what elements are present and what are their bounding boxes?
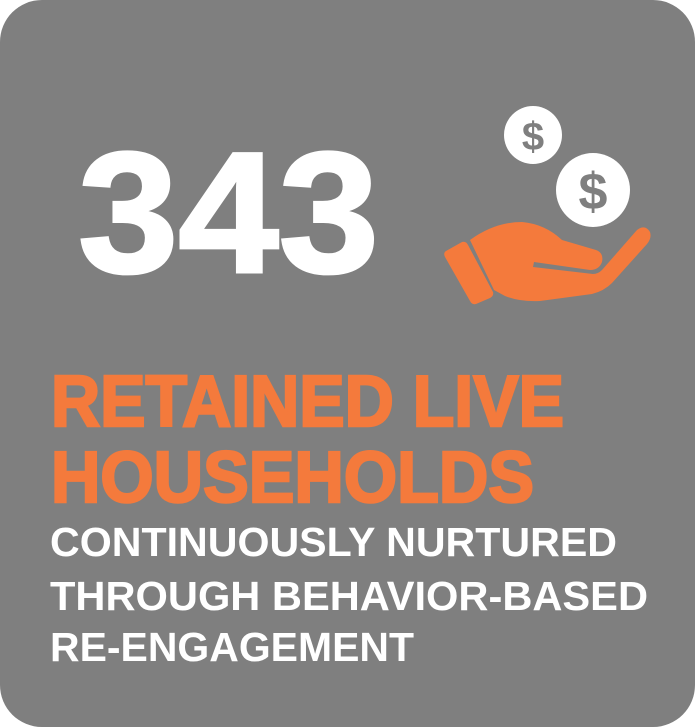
icon: small coin bbox=[504, 106, 562, 164]
icon: hand bbox=[444, 222, 651, 304]
text block: description bbox=[50, 519, 648, 670]
big number: 343 bbox=[78, 117, 379, 309]
text block: description: RE-ENGAGEMENT bbox=[50, 624, 414, 670]
icon: hand with coins bbox=[444, 106, 651, 304]
icon: large coin bbox=[556, 153, 630, 227]
heading: orange title: RETAINED LIVE bbox=[51, 362, 564, 442]
icon: small coin: $ bbox=[522, 115, 544, 159]
icon: large coin: $ bbox=[579, 163, 608, 221]
heading: orange title: HOUSEHOLDS bbox=[51, 438, 534, 518]
text block: description: CONTINUOUSLY NURTURED bbox=[50, 519, 617, 565]
text block: description: THROUGH BEHAVIOR-BASED bbox=[50, 573, 648, 619]
heading: orange title bbox=[51, 362, 564, 518]
